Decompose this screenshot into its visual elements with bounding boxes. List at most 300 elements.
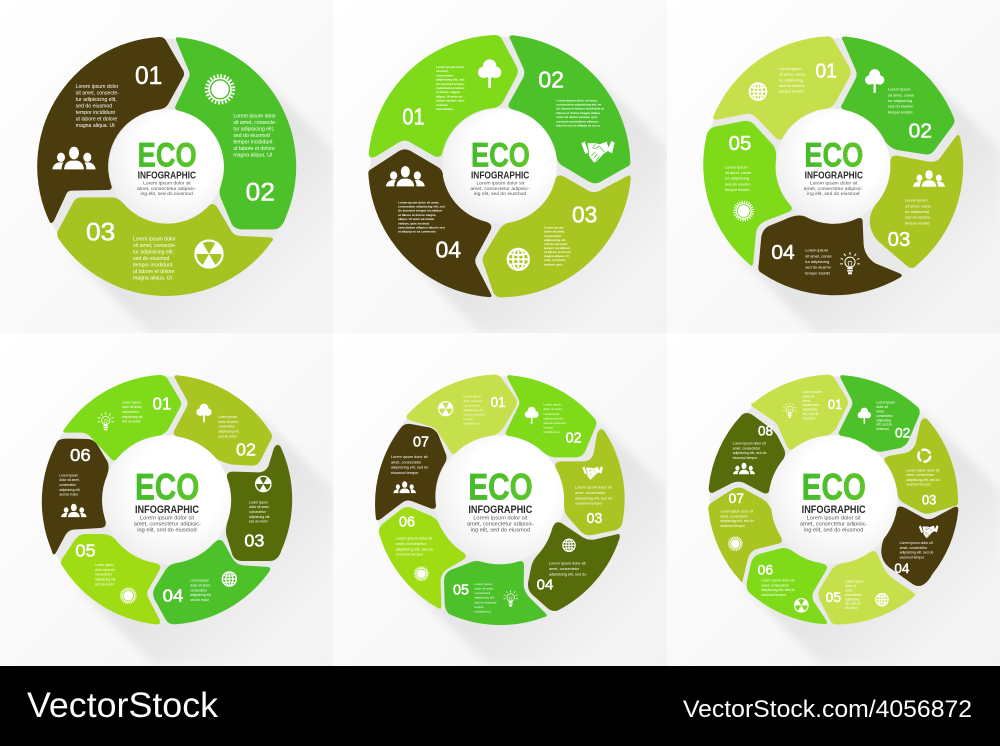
center title: ing elit, sed do eiusmod — [474, 191, 526, 197]
text block: adipisicing elit, — [249, 515, 270, 519]
segment 04 — [368, 149, 492, 297]
text block: sed do molor — [249, 520, 269, 524]
segment 06 — [379, 507, 466, 609]
number 03: 03 — [922, 492, 937, 508]
icon: cycle — [918, 450, 930, 462]
text block: adipiscing — [803, 408, 817, 412]
text block: amet, consectetur — [900, 546, 928, 550]
number 08: 08 — [758, 423, 773, 439]
center title: INFOGRAPHIC — [468, 504, 533, 516]
text block: et dolore magna — [436, 90, 460, 94]
icon: people — [913, 170, 945, 187]
text block: magna aliqua. Ut — [76, 123, 115, 129]
center title: Lorem ipsum dolor sit — [143, 181, 191, 187]
footer bar — [0, 666, 1000, 746]
text block: Lorem ipsum — [95, 563, 114, 567]
text block: consectetur — [845, 593, 863, 597]
center title: amet, consectetur adipisic- — [467, 521, 534, 527]
segment 01 — [713, 36, 851, 140]
text block: Lorem ipsum — [463, 394, 482, 398]
text block: incididunt ut labore — [436, 86, 465, 90]
number 05: 05 — [729, 133, 751, 155]
segment 05 — [61, 534, 160, 624]
text block: Lorem ipsum dolor — [436, 65, 465, 69]
segment 07 — [708, 488, 782, 582]
center disc — [769, 435, 897, 564]
text block: Lorem ipsum — [474, 582, 493, 586]
icon: radiation — [795, 599, 808, 612]
text block: elit, sed do — [876, 423, 892, 427]
text block: sed do eiusmod — [543, 421, 566, 425]
text block: consectetur — [436, 73, 454, 77]
icon: radiation — [256, 476, 271, 492]
text block: adipisicing elit, — [544, 238, 566, 242]
number 01: 01 — [153, 394, 171, 414]
number 01: 01 — [828, 396, 842, 412]
text block: Lorem ipsum — [59, 473, 78, 477]
text block: tempor incididunt — [544, 246, 570, 250]
center title: INFOGRAPHIC — [138, 170, 196, 181]
text block: adipisicing elit, — [95, 577, 116, 581]
center title: Lorem ipsum dolor sit — [140, 516, 194, 522]
text block: eiusmod tempor — [906, 483, 932, 487]
text block: Lorem ipsum dolor sit — [733, 442, 766, 446]
text block: Lorem ipsum — [779, 66, 802, 71]
number 01: 01 — [402, 103, 425, 129]
segment 04 — [153, 540, 270, 624]
icon: globe — [749, 83, 767, 100]
text block: consectetur — [876, 414, 894, 418]
center disc — [776, 109, 890, 223]
text block: adipisicing elit, — [59, 488, 81, 492]
text block: tur adipisicing — [725, 176, 749, 181]
text block: sit amet, consecte- — [133, 243, 177, 249]
center title — [467, 466, 534, 533]
center title: amet, consectetur adipisic- — [134, 521, 201, 527]
text block: do eiusmod tempor incididunt — [398, 209, 442, 213]
center title: ing elit, sed do eiusmod — [804, 527, 863, 533]
text block: sit amet, conse — [888, 92, 914, 97]
segment 05 — [818, 551, 915, 625]
text block: aliqua. Ut enim ad minim — [398, 217, 435, 221]
text block: dolor sit amet, — [543, 407, 563, 411]
text block: dolor sit — [803, 394, 814, 398]
text block: veniam, quis — [544, 262, 563, 266]
text block: dolor sit amet, — [218, 420, 239, 424]
text block: adipisicing elit, — [463, 408, 484, 412]
text block: Lorem ipsum dolor sit — [396, 537, 433, 541]
number 04: 04 — [771, 242, 795, 264]
text block: minim veniam, quis — [436, 99, 465, 103]
segment 03 — [555, 429, 625, 535]
number 04: 04 — [894, 560, 910, 576]
icon: sun — [121, 588, 136, 603]
segment 08 — [709, 413, 785, 494]
text block: dolor sit amet, — [122, 405, 143, 409]
text block: consectetur adipisicing elit, se — [556, 103, 601, 107]
segment 01 — [751, 375, 848, 450]
text block: ut labore et dolore — [76, 117, 117, 123]
icon: globe — [508, 249, 529, 270]
text block: sed do eiusmod — [233, 133, 270, 139]
text block: dolor sit — [845, 584, 856, 588]
image id url: VectorStock.com/4056872 — [683, 696, 972, 723]
panel: eco infographic with 5 segments — [703, 36, 1000, 333]
segment 02 — [839, 375, 920, 452]
text block: sed do eiusmod — [463, 413, 486, 417]
text block: dolor sit amet, — [190, 583, 211, 587]
text block: ut aliquip ex ea commodo — [398, 230, 436, 234]
text block: tempor — [543, 425, 553, 429]
center title: INFOGRAPHIC — [135, 504, 199, 516]
text block: adipisicing elit, sed do — [733, 451, 767, 455]
number 03: 03 — [587, 511, 602, 527]
segment 02 — [508, 35, 630, 183]
text block: Lorem ipsum — [888, 87, 911, 92]
number 07: 07 — [729, 490, 744, 506]
text block: nostrud — [436, 103, 448, 107]
text block: consectetur — [190, 588, 208, 592]
text block: Lorem ipsum — [543, 403, 562, 407]
text block: veniam, quis nostrud — [398, 221, 429, 225]
number 03: 03 — [244, 530, 264, 550]
number 07: 07 — [413, 434, 429, 450]
segment 05 — [444, 561, 547, 625]
text block: adipisicing elit, — [122, 415, 143, 419]
text block: sit amet, consecte- — [76, 91, 119, 97]
text block: eiusmod tempor — [733, 456, 758, 460]
text block: sed do molor — [218, 434, 238, 438]
icon: globe — [563, 539, 575, 551]
text block: adipiscing — [845, 597, 860, 601]
number 04: 04 — [163, 585, 184, 605]
text block: sed do molor — [190, 598, 210, 602]
segment 04 — [881, 506, 958, 586]
text block: Lorem ipsum dolor sit amet, — [398, 200, 439, 204]
number 02: 02 — [566, 431, 582, 447]
text block: sed do eiusmod — [133, 256, 170, 262]
text block: adipisicing elit, sed do — [549, 572, 586, 576]
text block: adipisicing elit, sed do — [761, 588, 795, 592]
center disc — [109, 109, 224, 224]
icon: people — [61, 504, 87, 517]
text block: Lorem ipsum — [725, 164, 748, 169]
text block: consectetur — [463, 403, 479, 407]
text block: consectetur — [474, 591, 490, 595]
text block: Lorem ipsum dolor sit — [900, 541, 933, 545]
text block: tur adipisicing — [905, 209, 929, 214]
center title: ing elit, sed do eiusmod — [471, 527, 530, 533]
center title: amet, consectetur adipisic- — [800, 521, 867, 527]
text block: amet, consectetur — [391, 460, 422, 464]
text block: amet, consectetur — [906, 473, 935, 477]
text block: adipisicing elit, — [190, 593, 212, 597]
text block: ut labore et dolore — [133, 269, 175, 275]
text block: amet, — [876, 409, 885, 413]
text block: tempor incididunt — [76, 110, 115, 116]
text block: tur adipisicing — [779, 77, 803, 82]
center title: Lorem ipsum dolor sit — [807, 516, 861, 522]
text block: tempor incidid — [805, 270, 830, 275]
number 01: 01 — [491, 395, 506, 411]
icon: light bulb — [783, 403, 796, 418]
segment 01 — [63, 375, 181, 461]
segment 07 — [375, 424, 447, 520]
text block: consectetur — [803, 403, 820, 407]
text block: elit, sed do — [845, 602, 861, 606]
base ring — [370, 36, 540, 202]
number 02: 02 — [895, 424, 911, 440]
center title: ECO — [135, 466, 199, 508]
text block: aliqua. Ut enim ad — [436, 94, 462, 98]
center title: ing elit, sed do eiusmod — [140, 191, 193, 197]
base ring — [52, 38, 190, 232]
segment 03 — [226, 445, 292, 561]
long shadow — [75, 75, 334, 333]
text block: consectetur — [543, 412, 559, 416]
text block: dolor sit amet, — [59, 478, 80, 482]
text block: Lorem ipsum — [876, 401, 895, 405]
text block: Lorem ipsum dolor sit — [761, 579, 794, 583]
segment 03 — [483, 175, 631, 297]
text block: incididunt ut — [463, 422, 480, 426]
icon: tree — [858, 408, 871, 424]
number 05: 05 — [453, 583, 469, 599]
icon: tree — [525, 407, 539, 424]
text block: adipisicing elit, sed do — [900, 551, 934, 555]
text block: labore et dolore magna aliqua. — [556, 111, 601, 115]
text block: sed do eiusmo — [905, 215, 931, 220]
text block: dolor sit — [876, 405, 888, 409]
text block: ut labore et dolore magna — [398, 213, 436, 217]
icon: sun — [729, 537, 742, 550]
text block: eiusmod — [803, 416, 815, 420]
segment 06 — [747, 548, 827, 624]
text block: Lorem ipsum dolor — [233, 113, 276, 119]
number 05: 05 — [826, 589, 841, 605]
icon: tree — [865, 69, 884, 93]
center title: amet, consectetur adipisic- — [804, 186, 863, 192]
text block: tempor incididunt — [133, 262, 173, 268]
text block: Lorem ipsum — [544, 226, 564, 230]
text block: tempor incidid — [888, 109, 912, 114]
text block: enim ad minim — [544, 258, 566, 262]
segment 02 — [841, 37, 955, 154]
text block: Lorem ipsum — [218, 415, 237, 419]
base ring — [376, 376, 623, 623]
center title: INFOGRAPHIC — [802, 504, 866, 516]
text block: ut labore et dolore — [544, 250, 571, 254]
brand logo text: VectorStock — [27, 686, 219, 725]
text block: sed do molor — [122, 420, 142, 424]
center title: INFOGRAPHIC — [471, 170, 529, 181]
center disc — [102, 435, 231, 564]
text block: sit amet, conse — [905, 203, 931, 208]
text block: eiusmod tempor — [720, 524, 746, 528]
center title: INFOGRAPHIC — [805, 170, 863, 181]
text block: sit amet, conse — [805, 253, 832, 258]
text block: dolor sit amet, — [463, 399, 483, 403]
text block: sed do eiusmod — [76, 104, 112, 110]
icon: sun — [207, 76, 233, 103]
text block: tur adipisicing elit, — [233, 126, 274, 132]
base ring — [43, 376, 290, 623]
number 04: 04 — [436, 237, 461, 263]
icon: globe — [876, 594, 888, 606]
text block: eiusmod — [876, 427, 889, 431]
text block: tur adipisicing — [805, 259, 829, 264]
text block: exercitation ullamco laboris nisi — [398, 226, 445, 230]
icon: radiation — [196, 241, 222, 267]
segment 01 — [369, 35, 518, 158]
text block: Lorem ipsum — [845, 580, 864, 584]
text block: eiusmod tempor — [396, 553, 424, 557]
center title: Lorem ipsum dolor sit — [477, 181, 525, 187]
long shadow — [411, 411, 667, 666]
text block: tur adipisicing — [888, 98, 912, 103]
icon: people — [386, 166, 425, 186]
text block: ut labore et dolore — [233, 146, 275, 152]
text block: amet, — [803, 399, 811, 403]
text block: nostrud exercitation ullamco — [556, 119, 599, 123]
panel: eco infographic with 8 segments — [667, 333, 1000, 666]
number 06: 06 — [758, 562, 773, 578]
text block: consectetur adipisicing elit, sed — [398, 205, 445, 209]
text block: adipisicing elit, sed — [436, 78, 465, 82]
icon: sun — [415, 567, 428, 580]
text block: amet, consectetur — [396, 542, 427, 546]
text block: sed do eiusmo — [805, 265, 832, 270]
text block: adipisicing elit, sed do — [720, 519, 754, 523]
text block: Lorem ipsum dolor sit — [391, 455, 429, 459]
text block: dolor sit amet, — [95, 568, 116, 572]
number 03: 03 — [888, 229, 910, 251]
segment 01 — [406, 375, 517, 454]
text block: adipisicing elit, sed do — [396, 547, 433, 551]
icon: globe — [222, 572, 236, 586]
number 01: 01 — [815, 60, 837, 82]
text block: adipisicing elit, — [474, 596, 495, 600]
text block: do eiusmod tempor incididunt ut — [556, 107, 604, 111]
text block: eiusmod — [845, 606, 857, 610]
text block: Lorem ipsum dolor sit — [720, 510, 753, 514]
number 01: 01 — [135, 62, 162, 90]
icon: people — [52, 147, 96, 169]
text block: sed do eiusmo — [779, 83, 805, 88]
text block: Lorem ipsum — [122, 400, 141, 404]
panel: eco infographic with 3 segments — [37, 37, 334, 333]
text block: adipiscing — [876, 418, 891, 422]
center title: ECO — [471, 137, 530, 175]
icon: people — [733, 463, 755, 474]
text block: consectetur — [544, 234, 562, 238]
text block: Lorem ipsum dolor sit amet, — [556, 98, 598, 102]
long shadow — [745, 411, 1000, 666]
center title: ECO — [468, 466, 533, 508]
text block: consectetur — [218, 425, 236, 429]
number 04: 04 — [537, 578, 553, 594]
base ring — [705, 38, 961, 294]
center title — [137, 142, 196, 196]
icon: handshake — [581, 141, 615, 163]
center title: ECO — [138, 137, 197, 175]
text block: adipisicing elit, — [218, 429, 240, 433]
segment 03 — [870, 135, 963, 268]
center title: ECO — [802, 466, 866, 508]
text block: magna aliqua. Ut — [233, 153, 273, 159]
center title — [804, 137, 863, 197]
icon: sun — [734, 202, 753, 220]
text block: Lorem ipsum — [805, 248, 829, 253]
text block: incididunt ut — [474, 609, 491, 613]
text block: Lorem ipsum — [905, 198, 928, 203]
icon: people — [393, 481, 416, 493]
center title: amet, consectetur adipisic- — [137, 186, 197, 192]
long shadow — [741, 74, 1000, 333]
text block: sed do molor — [95, 582, 115, 586]
text block: adipisicing elit, sed do — [906, 478, 940, 482]
text block: Lorem ipsum dolor sit — [906, 468, 939, 472]
text block: sed do eiusmo — [725, 181, 751, 186]
center title: Lorem ipsum dolor sit — [473, 516, 528, 522]
number 02: 02 — [909, 120, 932, 142]
number 03: 03 — [86, 219, 115, 247]
center title: ing elit, sed do eiusmod — [807, 191, 860, 197]
text block: laboris nisi ut aliquip ex ea co — [556, 124, 600, 128]
panel: eco infographic with 4 segments — [368, 35, 667, 333]
center title: amet, consectetur adipisic- — [470, 186, 530, 192]
text block: do eiusmod tempor — [436, 82, 465, 86]
text block: Lorem ipsum — [803, 390, 822, 394]
number 05: 05 — [75, 540, 96, 560]
segment 05 — [703, 121, 792, 266]
segment 04 — [758, 216, 902, 295]
text block: exercitation — [436, 107, 453, 111]
text block: incididunt ut — [543, 430, 560, 434]
long shadow — [407, 73, 667, 333]
center title: ing elit, sed do eiusmod — [137, 527, 197, 533]
text block: eiusmod tempor — [575, 502, 603, 506]
text block: sed do eiusmod — [474, 600, 497, 604]
icon: light bulb — [840, 252, 860, 274]
text block: Lorem ipsum — [249, 500, 268, 504]
icon: handshake — [919, 525, 938, 538]
text block: eiusmod tempor — [900, 555, 925, 559]
text block: tempor incidid — [905, 220, 929, 225]
text block: adipisicing elit, — [543, 416, 564, 420]
text block: sed do molor — [59, 493, 79, 497]
text block: eiusmod tempor — [391, 471, 419, 475]
center disc — [442, 109, 557, 223]
number 03: 03 — [572, 202, 597, 228]
text block: tur adipisicing elit, — [76, 97, 117, 103]
center title — [470, 142, 530, 196]
segment 02 — [175, 37, 296, 229]
segment 01 — [37, 37, 184, 223]
segment 04 — [528, 522, 620, 611]
text block: Lorem ipsum dolor — [76, 84, 119, 90]
text block: eiusmod tempor — [761, 593, 787, 597]
segment 03 — [57, 197, 273, 296]
text block: tempor incididunt — [233, 139, 273, 145]
icon: tree — [196, 404, 212, 422]
segment 02 — [506, 375, 596, 457]
text block: sit amet, conse — [725, 170, 751, 175]
long shadow — [78, 411, 334, 666]
text block: amet, consectetur — [549, 567, 580, 571]
icon: radiation — [439, 402, 453, 416]
center title: ECO — [804, 137, 863, 175]
